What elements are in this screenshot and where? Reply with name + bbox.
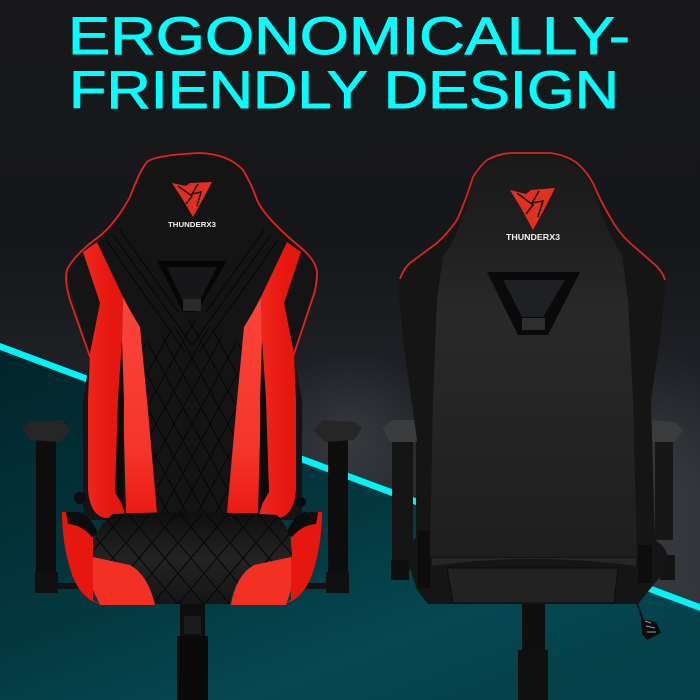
- front left armrest: [22, 420, 78, 593]
- front ThunderX3 logo: THUNDERX3: [168, 220, 216, 229]
- adjustment lever with tag: [637, 603, 661, 640]
- front right strip black gap: [260, 342, 269, 506]
- front seat side hinges: [66, 492, 318, 537]
- front view chair: [22, 153, 362, 700]
- back chair gas lift: [518, 604, 548, 700]
- front backrest diamond quilting: [140, 318, 244, 516]
- back lower band: [432, 558, 636, 566]
- title: [68, 7, 630, 120]
- back headrest opening: [487, 272, 580, 335]
- back right armrest: [646, 420, 683, 580]
- back chair outer shell: [398, 153, 667, 604]
- back chair red piping: [400, 153, 665, 280]
- front seat right red corner: [231, 557, 291, 605]
- back left armrest: [382, 420, 420, 580]
- front left seat flange: [62, 512, 100, 604]
- front headrest opening: [157, 261, 227, 312]
- back seat pan: [447, 568, 618, 603]
- back seat mechanism: [418, 530, 652, 588]
- glowing cyan floor line: [0, 343, 700, 611]
- front right outer red strip: [258, 242, 301, 518]
- front right seat flange: [284, 512, 322, 604]
- front left strip black gap: [115, 342, 124, 506]
- front ThunderX3 logo: [168, 182, 216, 229]
- front seat diamond quilting: [90, 514, 295, 606]
- front seat left red corner: [93, 557, 155, 605]
- front left inner red strip: [122, 297, 157, 513]
- front right inner red strip: [227, 297, 262, 513]
- front shoulder chevron stitching: [106, 230, 278, 352]
- title: ERGONOMICALLY-: [68, 7, 630, 66]
- background haze: [260, 350, 700, 610]
- front chair gas lift: [177, 604, 208, 700]
- teal floor: [0, 348, 700, 700]
- front seat cushion: [93, 512, 292, 604]
- back chair centre panel: [430, 155, 637, 557]
- back ThunderX3 logo: [506, 188, 560, 242]
- front right armrest: [306, 420, 362, 593]
- front chair red piping: [66, 153, 317, 357]
- back view chair: [382, 153, 683, 700]
- back ThunderX3 logo: THUNDERX3: [506, 232, 560, 242]
- front chair body: [66, 153, 317, 520]
- front left outer red strip: [83, 242, 126, 518]
- title: FRIENDLY DESIGN: [69, 61, 619, 120]
